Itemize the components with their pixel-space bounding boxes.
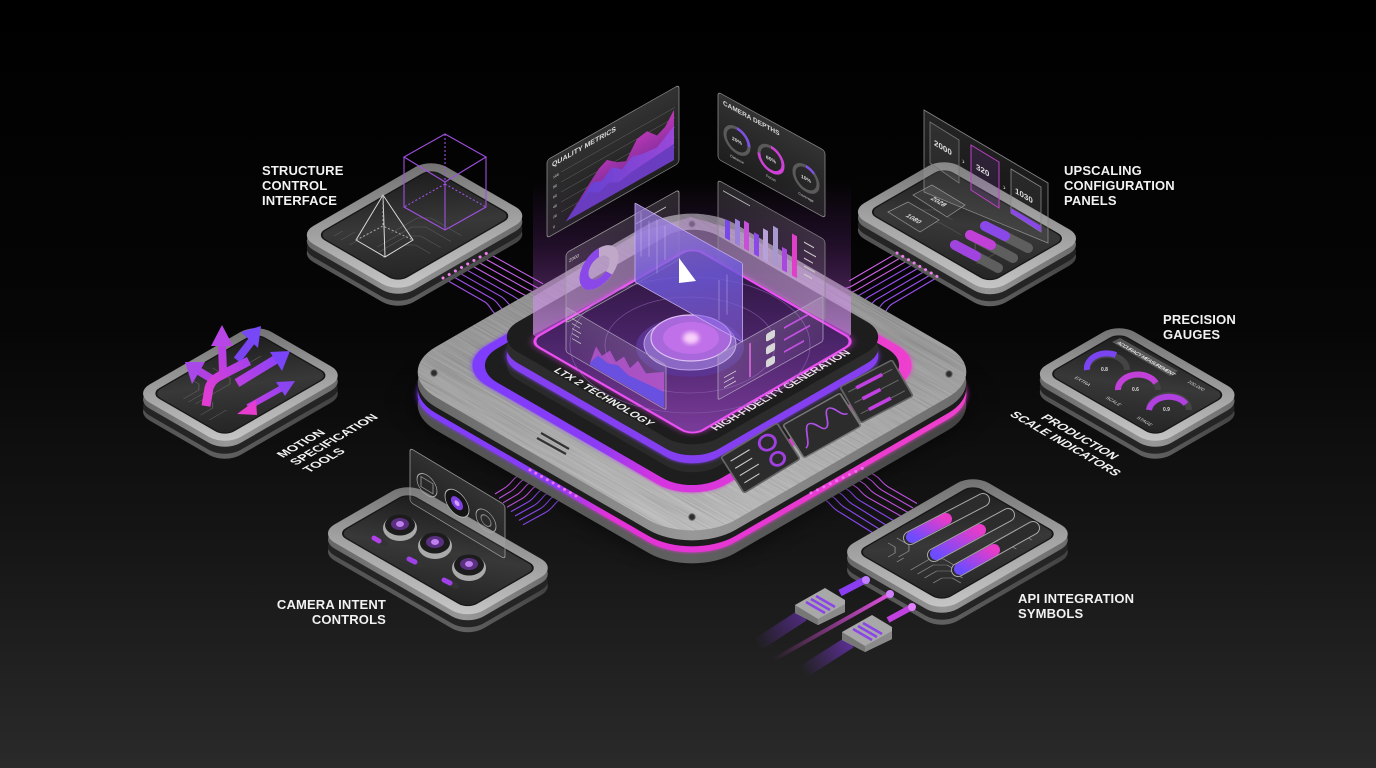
label: camera intent controls: CAMERA INTENT — [277, 597, 386, 612]
text: gauge header: ACCURACY MEASUREMENT — [1114, 341, 1177, 377]
panel: precision gauges tile — [1031, 323, 1244, 464]
panel: donut chart: 2000 — [569, 253, 579, 264]
icon: plates: 2028 — [928, 196, 948, 208]
connector traces: API tile to core — [813, 468, 917, 533]
icon: motion arrows — [185, 325, 295, 415]
panel: quality metrics: QUALITY METRICS — [552, 124, 616, 169]
panel: quality metrics: 80 — [553, 184, 557, 190]
label: motion specification tools: SPECIFICATION — [286, 412, 382, 467]
label: motion specification tools: TOOLS — [299, 446, 349, 475]
panel: camera depths: Distance — [730, 154, 744, 165]
slots — [537, 433, 569, 454]
holographic light column — [533, 180, 851, 428]
panel: front right controls — [718, 296, 823, 400]
connector traces: structure tile to core — [443, 253, 547, 318]
text: LTX 2 technology: LTX 2 TECHNOLOGY — [550, 366, 658, 428]
label: motion specification tools — [273, 405, 395, 475]
label: camera intent controls: CONTROLS — [312, 612, 386, 627]
panel: motion specification tile — [134, 323, 347, 464]
panel: API integration tile — [838, 474, 1077, 630]
lilac rim wash — [533, 217, 851, 335]
panel: upscaling floating cards — [924, 110, 1048, 243]
panel: front left chart — [566, 307, 666, 410]
label: production scale indicators: SCALE INDICATORS — [1006, 409, 1125, 478]
label: production scale indicators: PRODUCTION — [1037, 412, 1122, 462]
connector traces: upscaling tile to core — [841, 253, 938, 317]
panel: donut chart — [566, 190, 679, 323]
panel: camera depths: 60% — [766, 155, 776, 166]
panel: camera depths: 10% — [801, 174, 811, 185]
chart: gauges: EXTRA — [1072, 376, 1092, 388]
panel: quality metrics: 20 — [553, 214, 557, 220]
panel: control dashboard centre — [783, 393, 861, 458]
label: upscaling configuration panels: CONFIGURATION — [1064, 178, 1175, 193]
panel: quality metrics: 100 — [553, 172, 559, 180]
chart: API slot sliders — [910, 500, 1033, 570]
label: structure control interface: INTERFACE — [262, 193, 337, 208]
panel: bar chart — [718, 180, 825, 320]
panel: structure control tile — [298, 158, 531, 311]
panel: camera depths: Coverage — [798, 191, 814, 204]
panel: control dashboard right — [840, 360, 913, 423]
label: structure control interface: STRUCTURE — [262, 163, 344, 178]
connector dots — [897, 253, 938, 277]
vent strip — [536, 398, 626, 447]
connector dots — [443, 253, 487, 278]
panel: upscaling floating cards: 1030 — [1015, 186, 1033, 206]
chart: gauges: 0.9 — [1163, 407, 1170, 413]
neon ring — [452, 227, 932, 504]
label: API integration symbols: SYMBOLS — [1018, 606, 1084, 621]
panel: quality metrics: 40 — [553, 204, 557, 210]
connector traces: camera tile to core — [495, 470, 572, 525]
panel: camera intent tile — [319, 482, 557, 638]
icon: cursor — [679, 258, 696, 283]
panel: core platform — [392, 199, 992, 578]
icon: API cables and plugs — [757, 576, 916, 672]
chart: gauges: 0.6 — [1132, 387, 1139, 393]
label: structure control interface: CONTROL — [262, 178, 327, 193]
label: precision gauges: GAUGES — [1163, 327, 1220, 342]
icon: upscaling sliders — [955, 226, 1028, 268]
text: gauge header — [1112, 338, 1206, 392]
icon: lens toggles — [374, 538, 456, 586]
icon: screws — [431, 221, 952, 520]
panel: upscaling tile — [849, 157, 1085, 312]
panel: quality metrics — [547, 85, 679, 238]
panel: quality metrics: 60 — [553, 194, 557, 200]
chart: gauges: STAGE — [1134, 416, 1154, 428]
panel: control dashboard left — [721, 423, 800, 493]
panel: camera depths — [718, 92, 825, 218]
panel: upscaling floating cards: › — [962, 156, 965, 166]
chart: gauges — [1072, 353, 1189, 428]
panel: camera depths: 20% — [732, 136, 742, 147]
panel: camera depths: CAMERA DEPTHS — [723, 100, 780, 138]
chart: gauges: 0.8 — [1101, 367, 1108, 373]
icon: plates: 1080 — [903, 213, 923, 225]
label: API integration symbols: API INTEGRATION — [1018, 591, 1134, 606]
connector dots: core edge right — [811, 468, 863, 493]
label: upscaling configuration panels: UPSCALING — [1064, 163, 1142, 178]
panel: upscaling floating cards: › — [1003, 182, 1006, 192]
icon: wireframe cube — [404, 134, 486, 230]
text: high-fidelity generation: HIGH-FIDELITY GENERATION — [708, 348, 854, 433]
panel: central video screen — [635, 203, 742, 342]
label: precision gauges: PRECISION — [1163, 312, 1236, 327]
connector dots: core edge left — [530, 470, 578, 497]
panel: upscaling floating cards: 320 — [976, 162, 989, 179]
text: gauge header: 100,000 — [1185, 380, 1206, 392]
panel: glowing screen with lens — [529, 247, 856, 436]
panel: camera depths: Focus — [766, 174, 776, 183]
label: motion specification tools: MOTION — [273, 427, 329, 460]
icon: wireframe pyramid — [356, 195, 413, 257]
panel: upscaling floating cards: 2000 — [934, 138, 952, 158]
inner raised block — [492, 221, 893, 481]
chart: gauges: SCALE — [1103, 396, 1123, 408]
icon: plates — [888, 185, 965, 232]
panel: quality metrics: 0 — [553, 225, 555, 230]
icon: camera lenses — [383, 514, 486, 581]
label: upscaling configuration panels: PANELS — [1064, 193, 1117, 208]
panel: camera floating glass — [410, 448, 505, 559]
